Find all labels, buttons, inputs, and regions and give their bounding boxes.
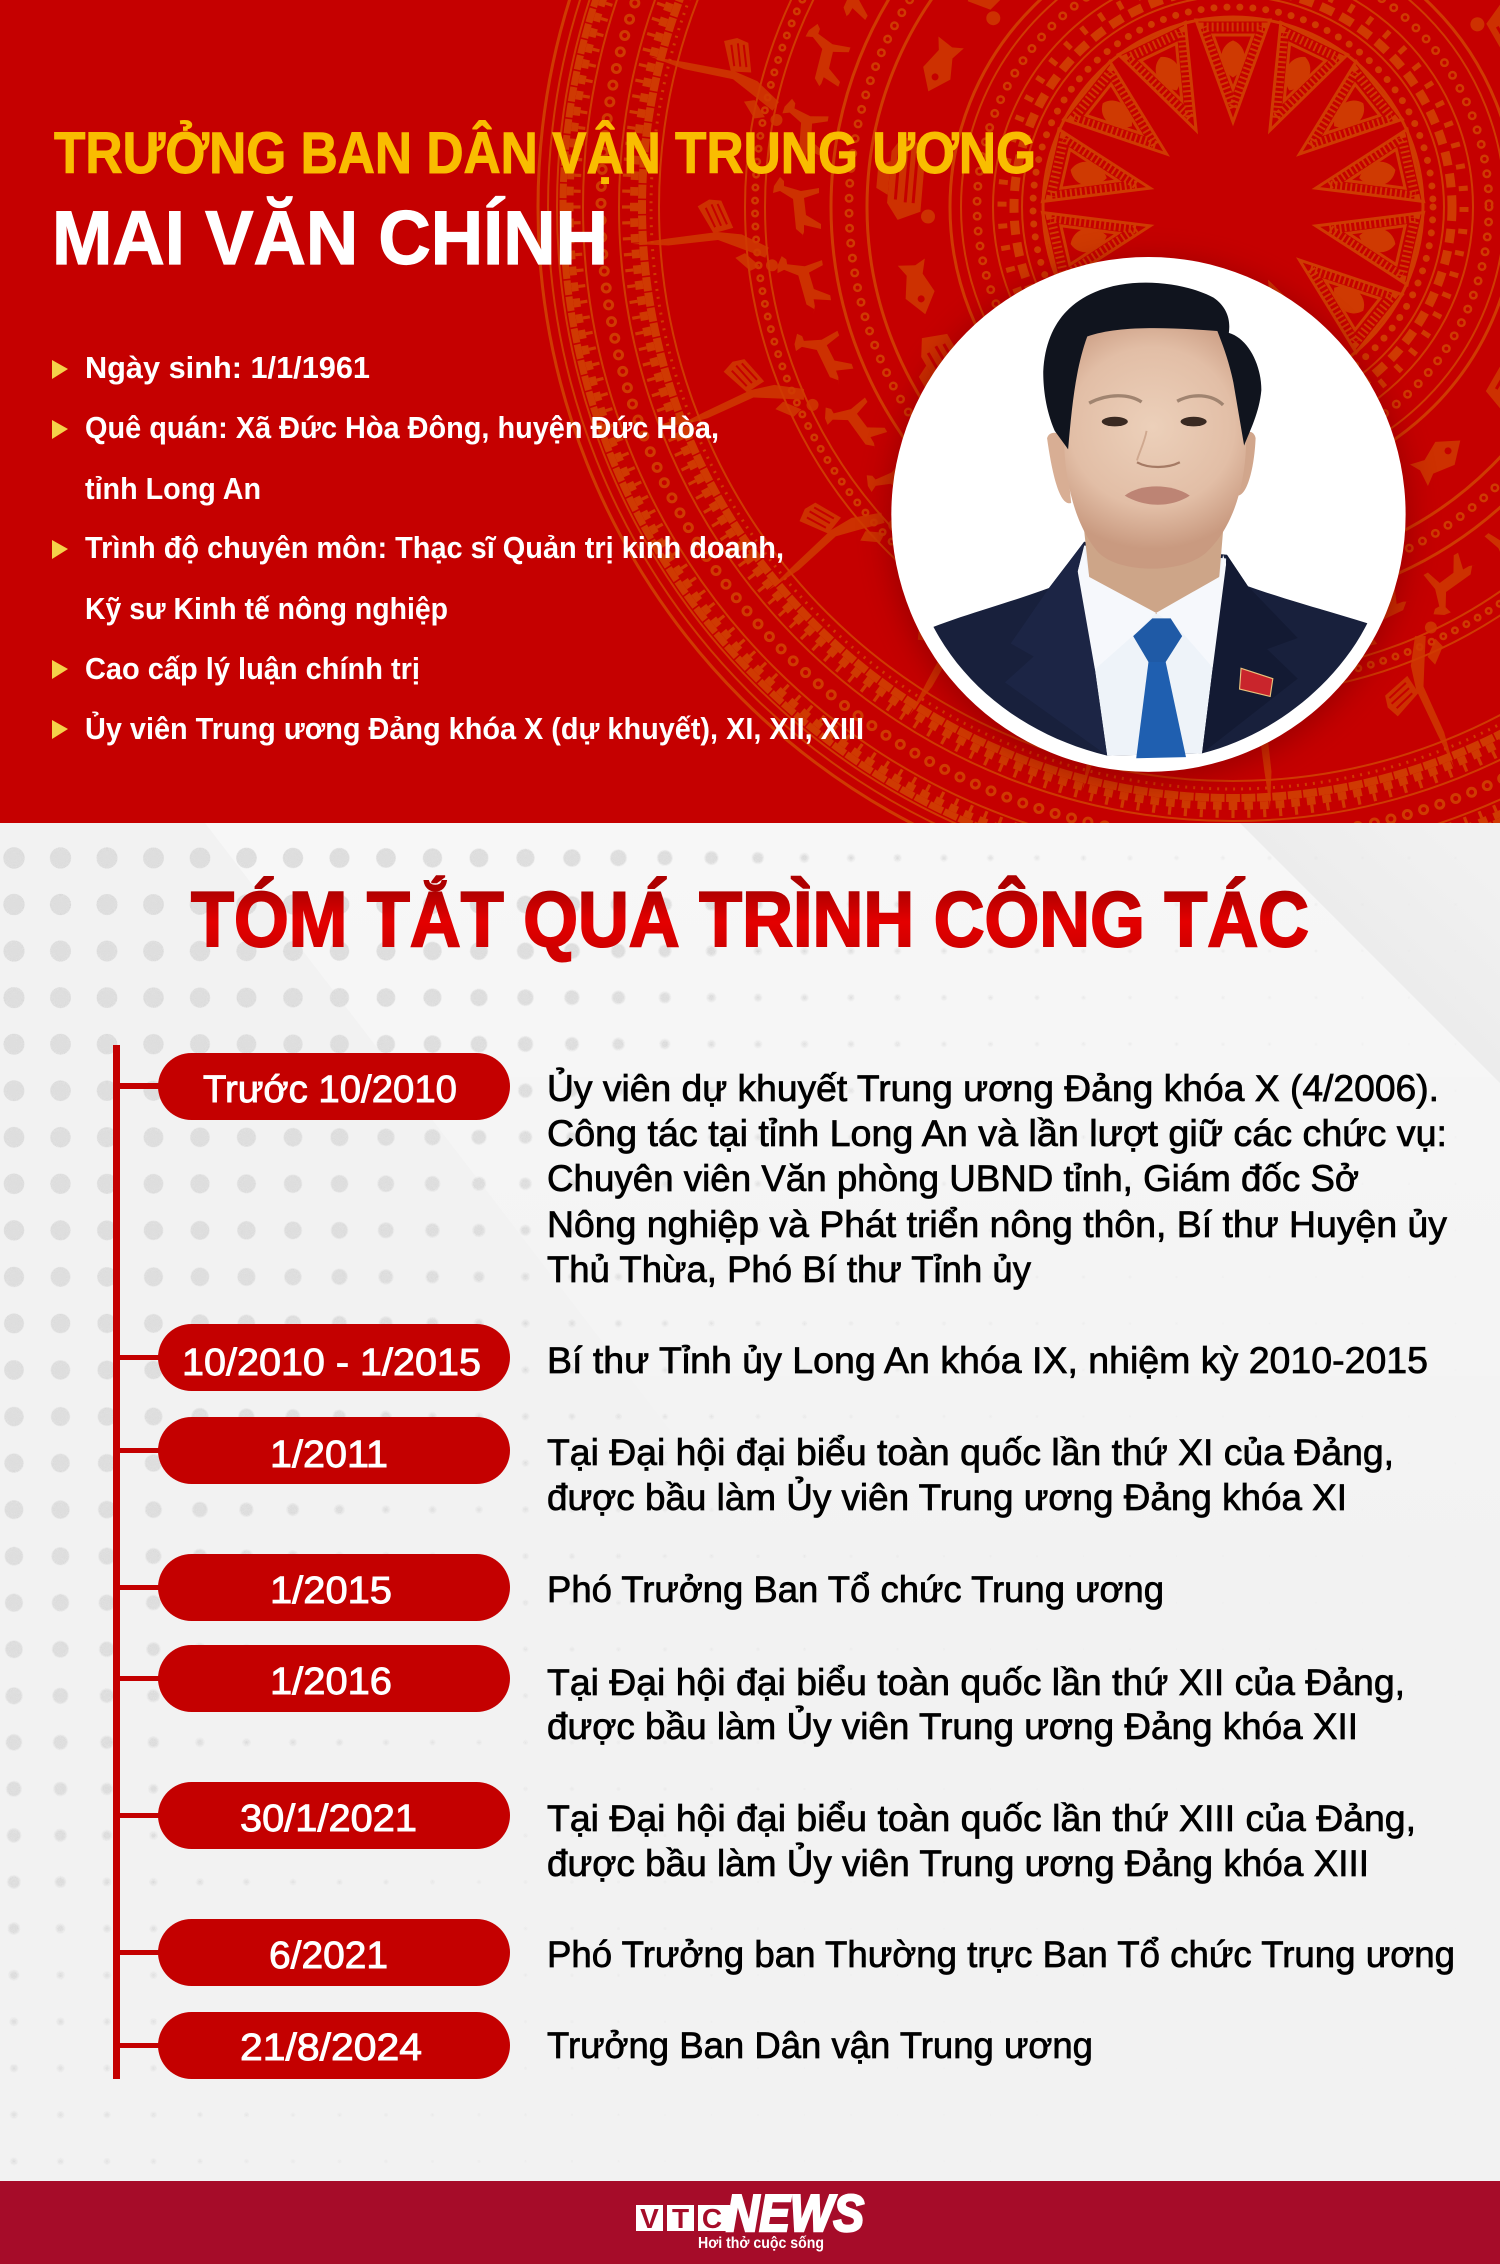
profile bullet list: Ngày sinh: 1/1/1961 [85,350,370,385]
profile bullet list: Kỹ sư Kinh tế nông nghiệp [85,591,448,626]
portrait in white circle [886,257,1410,782]
section heading: TÓM TẮT QUÁ TRÌNH CÔNG TÁC [191,875,1309,963]
header panel [0,0,1500,902]
timeline entry: 1/2011 [158,1417,1394,1518]
timeline entry: 30/1/2021: 30/1/2021 [240,1798,417,1840]
profile bullet list: Quê quán: Xã Đức Hòa Đông, huyện Đức Hòa, [85,410,719,445]
logo: VTC News: Hơi thở cuộc sống [698,2235,824,2252]
timeline entry: 1/2011: được bầu làm Ủy viên Trung ương Đảng khóa XI [547,1476,1347,1518]
title: position: TRƯỞNG BAN DÂN VẬN TRUNG ƯƠNG [54,121,1036,186]
timeline entry: 1/2011: Tại Đại hội đại biểu toàn quốc lần thứ XI của Đảng, [547,1432,1394,1473]
timeline entry: 1/2016: 1/2016 [270,1661,392,1703]
profile bullet list: Cao cấp lý luận chính trị [85,651,420,686]
timeline entry: Trước 10/2010: Trước 10/2010 [203,1069,457,1111]
logo: VTC News [636,2185,864,2252]
logo: VTC News: T [672,2203,689,2234]
timeline entry: 6/2021 [158,1919,1455,1986]
timeline entry: 1/2015: 1/2015 [270,1570,392,1612]
logo: VTC News: NEWS [726,2185,864,2243]
timeline entry: 6/2021: Phó Trưởng ban Thường trực Ban Tổ chức Trung ương [547,1934,1455,1975]
timeline entry: 10/2010 - 1/2015 [158,1324,1428,1391]
profile bullet list: tỉnh Long An [85,471,261,506]
timeline entry: 10/2010 - 1/2015: 10/2010 - 1/2015 [182,1342,481,1384]
timeline entry: 1/2015 [158,1554,1164,1621]
profile bullet list: Ủy viên Trung ương Đảng khóa X (dự khuyết), XI, XII, XIII [85,710,864,746]
timeline entry: Trước 10/2010: Công tác tại tỉnh Long An và lần lượt giữ các chức vụ: [547,1113,1447,1154]
timeline entry: 30/1/2021: Tại Đại hội đại biểu toàn quốc lần thứ XIII của Đảng, [547,1798,1416,1839]
timeline entry: 6/2021: 6/2021 [269,1935,388,1977]
timeline entry: Trước 10/2010: Ủy viên dự khuyết Trung ương Đảng khóa X (4/2006). [547,1067,1439,1109]
footer band with VTC News logo [0,2181,1500,2264]
timeline entry: 21/8/2024: 21/8/2024 [240,2027,422,2069]
logo: VTC News: C [702,2203,722,2234]
timeline entry: 30/1/2021 [158,1782,1416,1884]
timeline entry: 1/2016 [158,1645,1405,1747]
timeline entry: Trước 10/2010 [158,1053,1448,1290]
timeline entry: Trước 10/2010: Chuyên viên Văn phòng UBND tỉnh, Giám đốc Sở [547,1158,1359,1199]
timeline entry: 21/8/2024 [158,2012,1093,2079]
timeline entry: 21/8/2024: Trưởng Ban Dân vận Trung ương [547,2025,1093,2066]
timeline entry: Trước 10/2010: Thủ Thừa, Phó Bí thư Tỉnh ủy [547,1249,1031,1290]
timeline entry: 30/1/2021: được bầu làm Ủy viên Trung ương Đảng khóa XIII [547,1842,1369,1884]
timeline entry: 1/2016: được bầu làm Ủy viên Trung ương Đảng khóa XII [547,1705,1358,1747]
timeline entry: 1/2015: Phó Trưởng Ban Tổ chức Trung ương [547,1569,1164,1610]
profile bullet list: Trình độ chuyên môn: Thạc sĩ Quản trị kinh doanh, [85,530,784,565]
timeline axis [113,1045,160,2079]
logo: VTC News: V [640,2203,659,2234]
bronze drum pattern background [538,0,1500,902]
profile bullet list [52,350,864,746]
title: name: MAI VĂN CHÍNH [52,196,608,281]
timeline entry: 1/2016: Tại Đại hội đại biểu toàn quốc lần thứ XII của Đảng, [547,1662,1405,1703]
work history panel background [3,847,1363,2164]
timeline entry: 10/2010 - 1/2015: Bí thư Tỉnh ủy Long An khóa IX, nhiệm kỳ 2010-2015 [547,1340,1428,1381]
timeline entry: 1/2011: 1/2011 [270,1434,388,1476]
timeline entry: Trước 10/2010: Nông nghiệp và Phát triển nông thôn, Bí thư Huyện ủy [547,1204,1448,1245]
